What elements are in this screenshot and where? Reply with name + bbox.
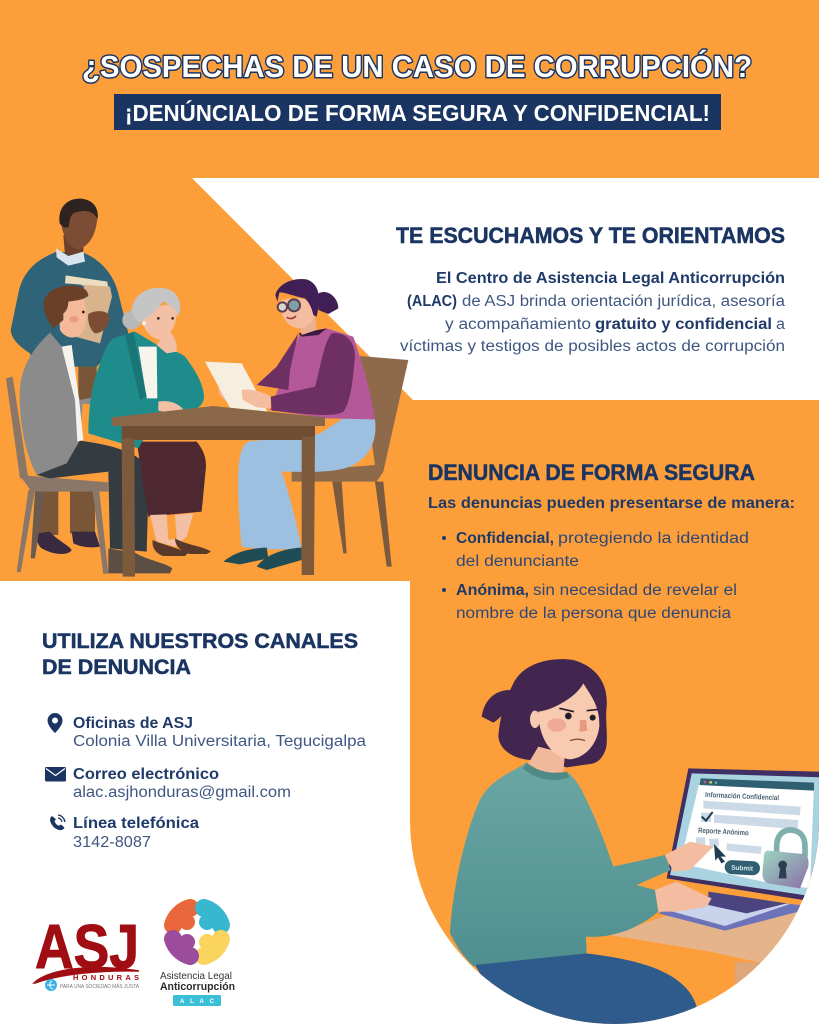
- padlock: [762, 830, 809, 888]
- icon: envelope: [45, 767, 66, 782]
- bullet list: Confidencial,: [456, 530, 554, 547]
- bullet list: nombre de la persona que denuncia: [456, 605, 731, 622]
- subtitle banner: ¡DENÚNCIALO DE FORMA SEGURA Y CONFIDENCIAL!: [125, 99, 710, 126]
- bullet list: sin necesidad de revelar el: [533, 582, 737, 599]
- logo: ASJ Honduras: HONDURAS: [73, 973, 139, 982]
- right chair: [292, 356, 408, 567]
- text block: ALAC description: víctimas y testigos de posibles actos de corrupción: [400, 338, 785, 355]
- contact: telefono: [73, 815, 199, 851]
- face: [530, 683, 599, 759]
- logo: ALAC: ALAC: [180, 999, 215, 1005]
- submit button: [724, 860, 760, 876]
- contact list: [45, 713, 366, 851]
- desk: [610, 908, 799, 985]
- heading: denuncia segura: DENUNCIA DE FORMA SEGURA: [428, 460, 755, 485]
- logo: ALAC: Asistencia Legal: [160, 970, 232, 982]
- keyboard base: [658, 895, 800, 931]
- icon: phone: [50, 815, 65, 830]
- panel: white bottom left with orange rounded column: [0, 581, 819, 1024]
- screen text: informacion confidencial: Información Confidencial: [705, 790, 779, 802]
- subtitle banner: [114, 94, 721, 130]
- heading: canales: DE DENUNCIA: [42, 656, 191, 679]
- title: ¿SOSPECHAS DE UN CASO DE CORRUPCIÓN?: [82, 48, 752, 84]
- submit button: Submit: [731, 865, 754, 873]
- heading: te escuchamos: TE ESCUCHAMOS Y TE ORIENTAMOS: [396, 223, 785, 248]
- icon: four people circle: [173, 908, 221, 956]
- bullet list: Anónima,: [456, 582, 529, 599]
- hair bun: [482, 690, 510, 723]
- contact: correo: [73, 766, 291, 801]
- contact: oficinas: Colonia Villa Universitaria, Tegucigalpa: [73, 733, 366, 750]
- hair back: [498, 659, 607, 767]
- older woman: [88, 288, 211, 556]
- contact: correo: alac.asjhonduras@gmail.com: [73, 784, 291, 801]
- text: intro denuncias: Las denuncias pueden presentarse de manera:: [428, 495, 795, 512]
- hands: [655, 842, 713, 912]
- text block: ALAC description: [400, 270, 785, 355]
- panel: white top right: [192, 178, 819, 400]
- bullet list: protegiendo la identidad: [558, 530, 749, 547]
- bullet list: del denunciante: [456, 553, 579, 570]
- laptop: [658, 768, 819, 931]
- text block: ALAC description: (ALAC): [407, 293, 457, 310]
- standing man: [11, 199, 128, 554]
- contact: oficinas: Oficinas de ASJ: [73, 715, 193, 732]
- heading: canales: UTILIZA NUESTROS CANALES: [42, 630, 358, 653]
- contact: oficinas: [73, 715, 366, 750]
- logo: ASJ Honduras: ASJ: [35, 913, 139, 982]
- icon: location pin: [48, 713, 63, 733]
- logo: ASJ Honduras: PARA UNA SOCIEDAD MÁS JUSTA: [60, 983, 139, 990]
- woman with glasses: [205, 279, 375, 570]
- illustration: four people at a table: [6, 199, 408, 577]
- contact: telefono: 3142-8087: [73, 834, 151, 851]
- cursor: [714, 844, 726, 863]
- text block: ALAC description: a: [776, 316, 785, 333]
- sweater collar: [523, 763, 569, 780]
- text block: ALAC description: y acompañamiento: [445, 316, 591, 333]
- logo: ALAC: [160, 908, 235, 1006]
- text block: ALAC description: El Centro de Asistencia Legal Anticorrupción: [436, 270, 785, 287]
- table: [112, 406, 325, 577]
- neck: [528, 747, 565, 773]
- text block: ALAC description: gratuito y confidencial: [595, 316, 772, 333]
- sweater: [450, 763, 671, 966]
- contact: telefono: Línea telefónica: [73, 815, 199, 832]
- logo: ALAC: Anticorrupción: [160, 981, 235, 993]
- heading: canales: [42, 630, 358, 679]
- illustration: woman at laptop: [450, 659, 819, 1024]
- seated man chair: [6, 377, 108, 574]
- seated man: [20, 286, 172, 573]
- contact: correo: Correo electrónico: [73, 766, 219, 783]
- bullet list: [442, 530, 749, 622]
- screen text: reporte anonimo: Reporte Anónimo: [698, 826, 749, 837]
- text block: ALAC description: de ASJ brinda orientación jurídica, asesoría: [462, 293, 785, 310]
- jeans: [475, 953, 697, 1024]
